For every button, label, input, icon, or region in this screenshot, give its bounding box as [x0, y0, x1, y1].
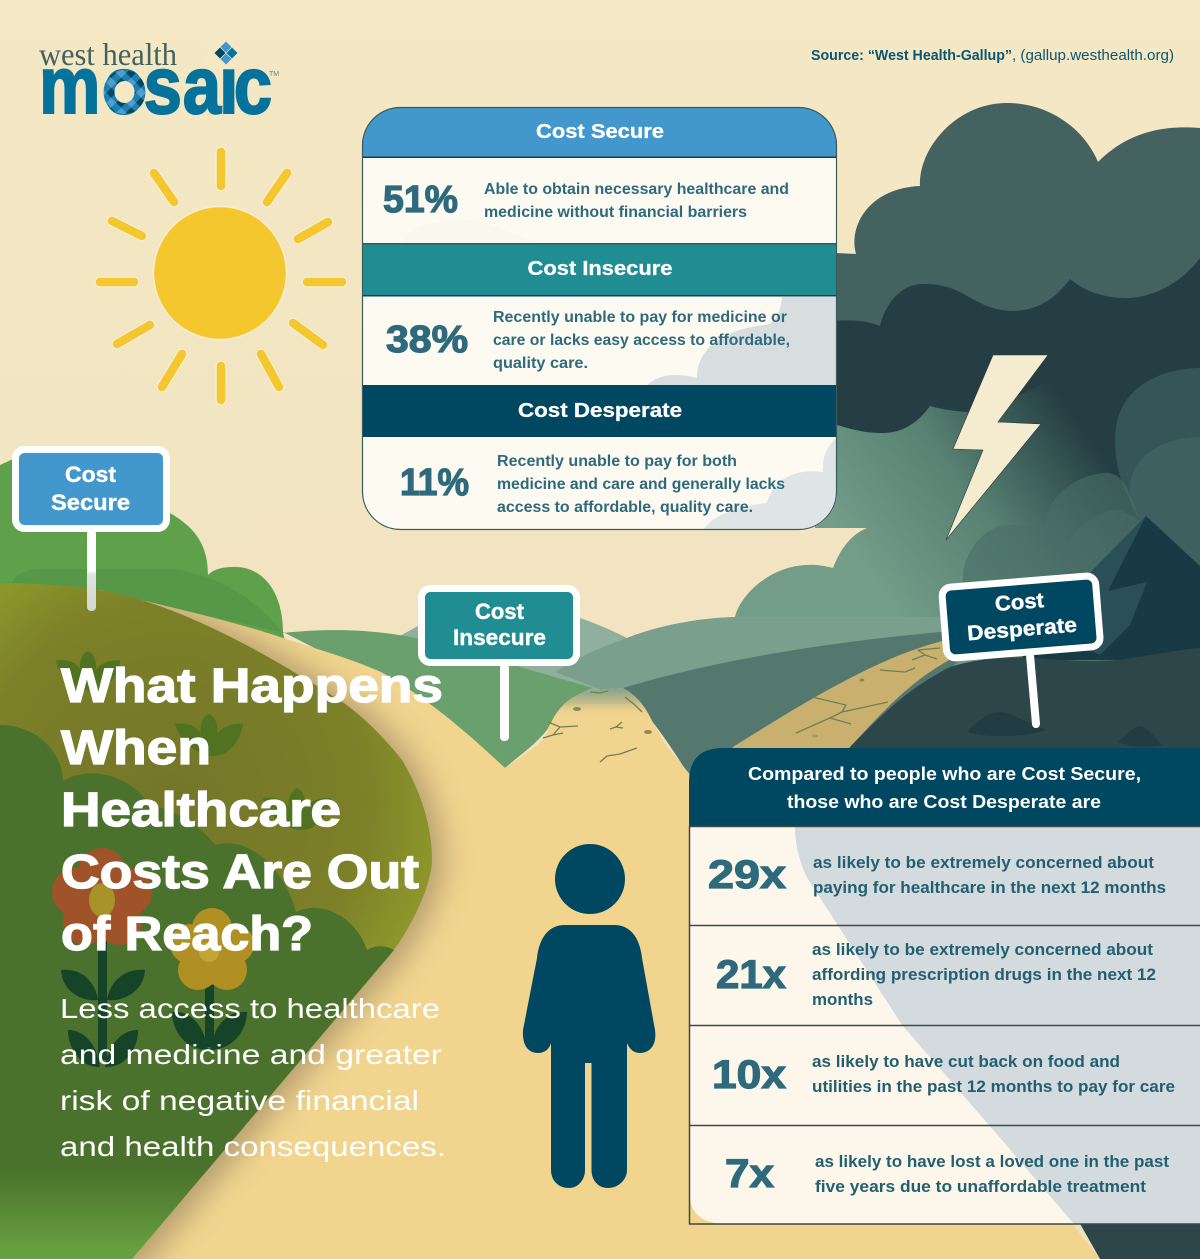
mountain — [1020, 516, 1200, 660]
subtitle — [60, 993, 446, 1162]
logo: west health mosaic: TM — [269, 71, 279, 78]
row: cost secure: 51% — [383, 179, 458, 221]
leaf clusters — [56, 651, 331, 830]
row: 21x — [716, 941, 1156, 1009]
row: cost desperate: access to affordable, quality care. — [497, 499, 753, 516]
row: 7x: five years due to unaffordable treatment — [815, 1178, 1147, 1196]
row: 21x: months — [812, 991, 873, 1009]
row: cost desperate — [400, 400, 785, 516]
row: 10x: 10x — [712, 1053, 786, 1097]
subtitle: and health consequences. — [60, 1131, 446, 1162]
foreground dark green bushes — [0, 725, 394, 1259]
sign: cost desperate: Desperate — [966, 614, 1078, 645]
row: cost secure — [383, 121, 789, 221]
row: 21x: 21x — [716, 953, 786, 997]
row: cost insecure: Cost Insecure — [528, 258, 672, 280]
row: cost secure: Able to obtain necessary healthcare and — [484, 181, 789, 198]
row: 7x: 7x — [725, 1152, 774, 1196]
title — [61, 660, 443, 961]
back bush — [0, 451, 300, 700]
row: cost secure: Cost Secure — [536, 121, 664, 143]
bush shade band — [8, 569, 282, 632]
sign: cost desperate — [941, 575, 1101, 724]
icon: red flower — [52, 848, 152, 1067]
title: of Reach? — [61, 908, 313, 961]
sign: cost secure: Secure — [51, 490, 130, 515]
table heading: Compared to people who are Cost Secure, — [748, 764, 1141, 784]
source line: Source: “West Health-Gallup” — [811, 48, 1012, 64]
row: 29x: 29x — [708, 853, 786, 897]
row: 10x — [712, 1053, 1175, 1097]
foreground dark hill — [840, 648, 1200, 1259]
far hills — [400, 608, 960, 780]
title: When — [61, 722, 211, 775]
row: 29x: paying for healthcare in the next 12 months — [813, 879, 1166, 897]
rocks — [968, 712, 1162, 747]
road shadow from hill — [0, 575, 670, 1259]
table heading: those who are Cost Desperate are — [787, 792, 1101, 812]
row: cost desperate: medicine and care and generally lacks — [497, 476, 785, 493]
panel: comparison table — [689, 748, 1200, 1224]
row: 29x — [708, 853, 1166, 897]
row: cost insecure: 38% — [386, 319, 468, 361]
row: 21x: as likely to be extremely concerned about — [812, 941, 1154, 959]
road: far section — [720, 640, 955, 770]
title: Costs Are Out — [61, 846, 419, 899]
sign: cost secure: Cost — [65, 462, 117, 487]
green hill — [283, 630, 593, 768]
sign: cost desperate: Cost — [994, 589, 1045, 616]
source line: , (gallup.westhealth.org) — [1012, 48, 1174, 64]
row: 7x: as likely to have lost a loved one in the past — [815, 1153, 1170, 1171]
row: 29x: as likely to be extremely concerned about — [813, 854, 1155, 872]
row: cost desperate: Recently unable to pay for both — [497, 453, 737, 470]
row: 21x: affording prescription drugs in the next 12 — [812, 966, 1156, 984]
row: cost desperate: 11% — [400, 462, 469, 504]
row: cost insecure: care or lacks easy access to affordable, — [493, 332, 790, 349]
row: cost desperate: Cost Desperate — [518, 400, 682, 422]
olive hill — [0, 583, 432, 1259]
row: 7x — [725, 1152, 1170, 1196]
row: cost insecure: quality care. — [493, 355, 588, 372]
panel: cost categories — [362, 107, 837, 530]
subtitle: risk of negative financial — [60, 1085, 419, 1116]
sign: cost insecure — [422, 588, 576, 741]
sandy road — [0, 590, 1100, 1259]
row: 10x: as likely to have cut back on food and — [812, 1053, 1120, 1071]
source line — [811, 48, 1174, 64]
road cracks — [543, 648, 940, 762]
row: 10x: utilities in the past 12 months to pay for care — [812, 1078, 1175, 1096]
row: cost secure: medicine without financial barriers — [484, 204, 747, 221]
icon: yellow flower — [170, 908, 254, 1050]
sign: cost insecure: Cost — [475, 599, 525, 624]
row: cost insecure: Recently unable to pay for medicine or — [493, 309, 787, 326]
table heading — [748, 764, 1141, 812]
row: cost insecure — [386, 258, 790, 372]
title: Healthcare — [61, 784, 341, 837]
subtitle: Less access to healthcare — [60, 993, 440, 1024]
title: What Happens — [61, 660, 443, 713]
sign: cost secure — [16, 450, 166, 611]
logo: west health mosaic: west health — [39, 36, 177, 72]
logo: west health mosaic: mosaic — [39, 40, 272, 130]
icon: person silhouette — [523, 844, 655, 1188]
subtitle: and medicine and greater — [60, 1039, 442, 1070]
icon: sun — [100, 152, 342, 400]
sign: cost insecure: Insecure — [453, 625, 546, 650]
storm clouds — [627, 103, 1200, 690]
icon: lightning bolt — [946, 355, 1048, 540]
